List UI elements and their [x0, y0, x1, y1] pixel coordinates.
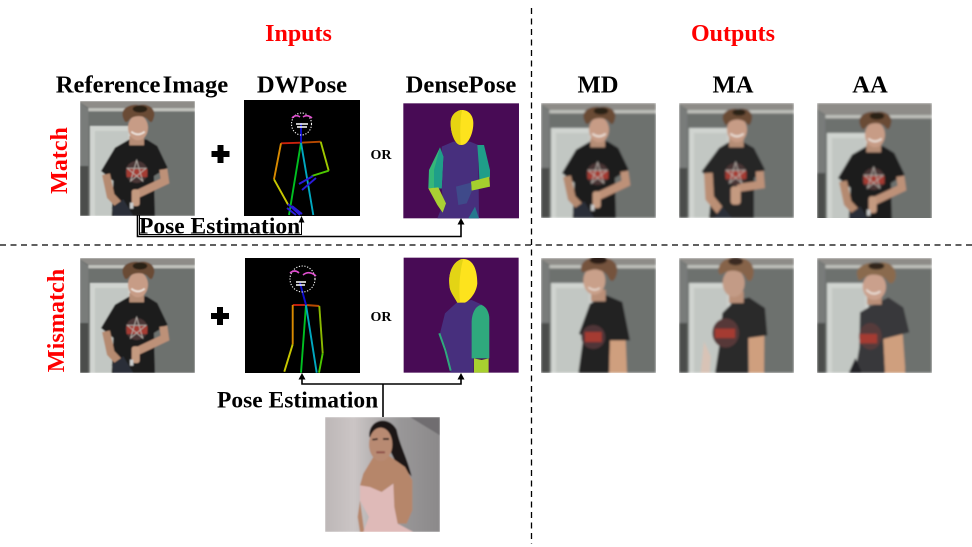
row label: Mismatch: Mismatch [43, 268, 70, 372]
DensePose map, match row [403, 103, 519, 218]
DWPose skeleton, mismatch row [245, 258, 360, 373]
DensePose map, mismatch row [404, 258, 519, 373]
output: AA, match row [817, 103, 932, 223]
row label: Match: Match [47, 127, 73, 194]
pose estimation connector, mismatch row [298, 373, 464, 417]
DWPose skeleton, match row [244, 100, 360, 216]
label: Pose Estimation, match row: Pose Estimation [139, 214, 300, 240]
icon: plus, match row [212, 145, 230, 163]
column label: MD: MD [578, 72, 618, 98]
heading: Outputs: Outputs [691, 21, 775, 47]
column label: AA: AA [852, 72, 888, 98]
output: MA, match row [679, 103, 794, 218]
text: OR, match row: OR [370, 148, 392, 163]
output: MD, mismatch row [541, 256, 656, 373]
column label: DWPose: DWPose [257, 72, 347, 98]
output: AA, mismatch row [817, 258, 932, 373]
text: OR, mismatch row: OR [370, 310, 392, 325]
output: MA, mismatch row [679, 257, 794, 373]
divider: vertical dashed [530, 8, 532, 544]
output: MD, match row [541, 103, 656, 218]
photo: reference image, mismatch row [80, 258, 195, 373]
pose estimation connector, match row [138, 215, 464, 236]
divider: horizontal dashed [0, 244, 972, 246]
column label: Reference Image: Reference Image [56, 72, 228, 98]
label: Pose Estimation, mismatch row: Pose Estimation [217, 388, 378, 414]
heading: Inputs: Inputs [265, 21, 332, 47]
column label: MA: MA [713, 72, 754, 98]
column label: DensePose: DensePose [406, 72, 516, 98]
photo: reference image, match row [80, 101, 195, 216]
photo: driving pose woman [325, 417, 440, 532]
icon: plus, mismatch row [211, 307, 229, 325]
